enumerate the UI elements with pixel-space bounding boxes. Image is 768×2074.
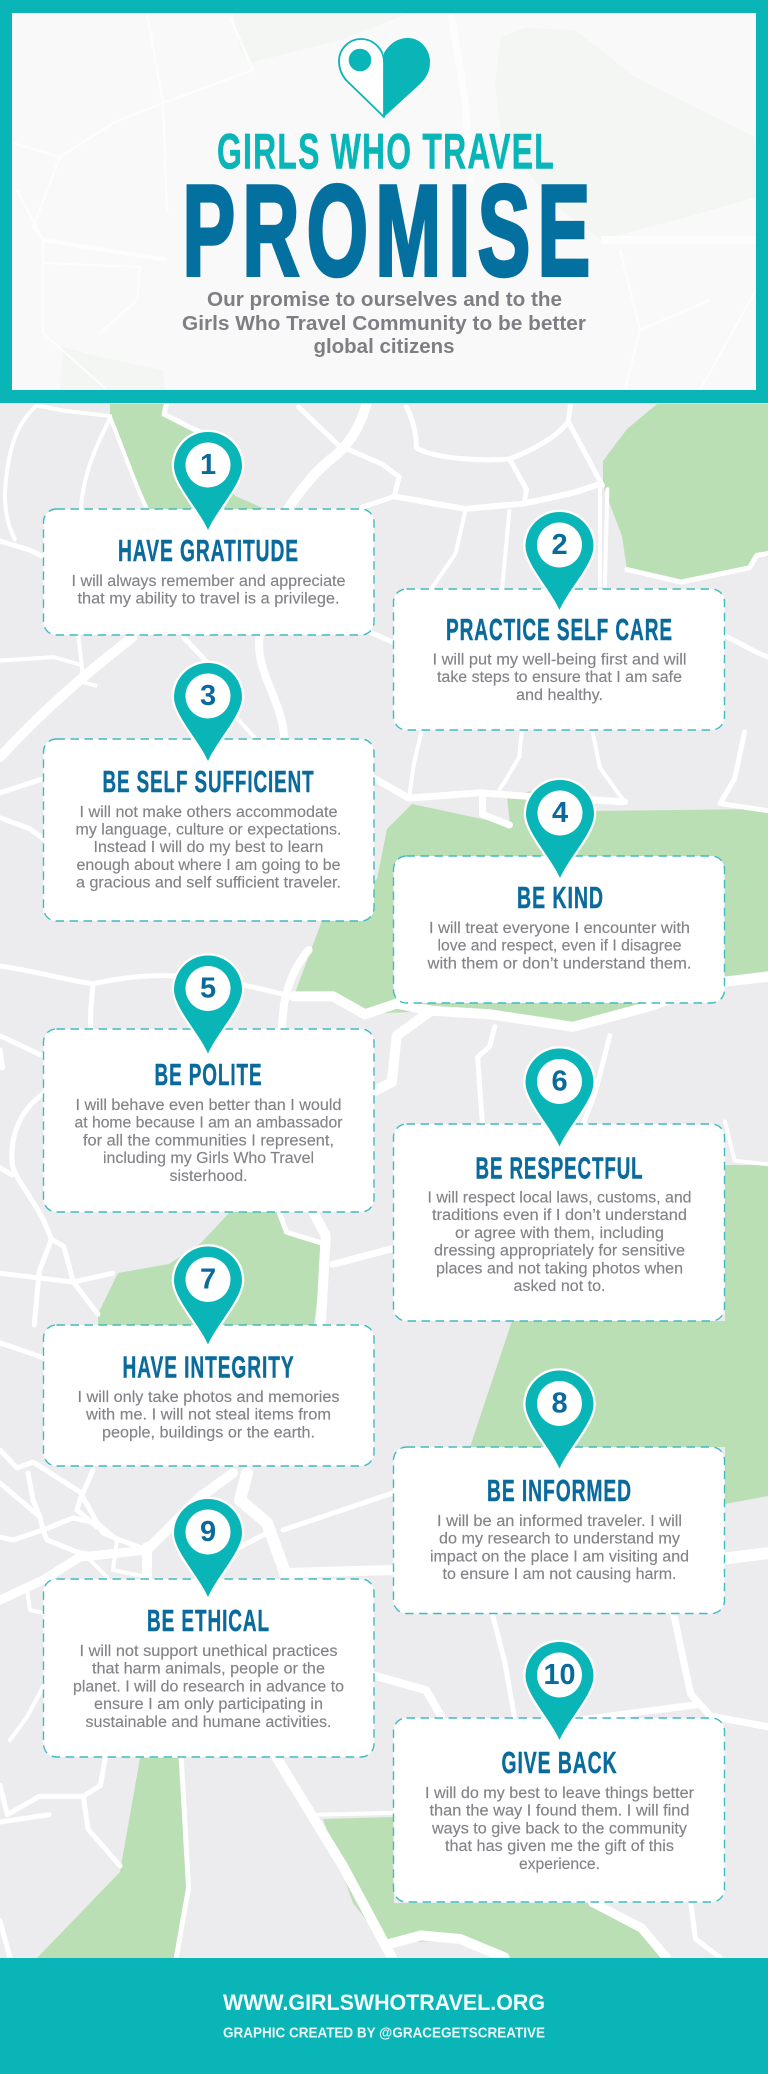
icon: pin 7: [174, 1246, 242, 1344]
panel: be ethical: planet. I will do research in advance to: [73, 1678, 344, 1695]
panel: be self sufficient: BE SELF SUFFICIENT: [102, 764, 314, 799]
icon: pin 3: 3: [200, 680, 216, 712]
panel: be respectful: I will respect local laws, customs, and: [428, 1190, 692, 1206]
panel: have gratitude: HAVE GRATITUDE: [118, 533, 299, 568]
panel: give back: that has given me the gift of this: [445, 1838, 674, 1855]
subtitle: Girls Who Travel Community to be better: [182, 312, 586, 335]
subtitle: Our promise to ourselves and to the: [207, 288, 562, 311]
icon: pin 10: 10: [544, 1659, 576, 1691]
icon: pin 9: 9: [200, 1516, 216, 1548]
panel: be polite: [44, 956, 374, 1212]
panel: be informed: [394, 1370, 724, 1614]
panel: be respectful: BE RESPECTFUL: [476, 1150, 644, 1186]
panel: have integrity: people, buildings or the earth.: [102, 1424, 315, 1441]
footer: [0, 1958, 768, 2074]
icon: pin 1: 1: [200, 449, 216, 481]
panel: be informed: I will be an informed traveler. I will: [437, 1513, 682, 1530]
panel: be informed: BE INFORMED: [487, 1473, 632, 1508]
icon: pin 9: [174, 1499, 242, 1597]
panel: be respectful: dressing appropriately for sensitive: [434, 1243, 685, 1260]
panel: be respectful: [394, 1048, 724, 1321]
icon: heart map pin logo: [339, 38, 430, 117]
panel: be polite: I will behave even better than I would: [76, 1097, 342, 1114]
subtitle: [182, 288, 586, 358]
footer credit: GRAPHIC CREATED BY @GRACEGETSCREATIVE: [223, 2026, 545, 2042]
icon: pin 5: 5: [200, 972, 216, 1004]
panel: be informed: to ensure I am not causing harm.: [442, 1566, 676, 1583]
panel: practice self care: and healthy.: [516, 687, 603, 704]
panel: be ethical: BE ETHICAL: [147, 1603, 270, 1638]
panel: have integrity: [44, 1246, 374, 1466]
subtitle: global citizens: [314, 335, 454, 358]
panel: be polite: sisterhood.: [170, 1168, 248, 1185]
panel: be kind: I will treat everyone I encounter with: [429, 920, 690, 937]
panel: practice self care: [394, 512, 724, 730]
panel: give back: ways to give back to the community: [431, 1820, 687, 1837]
icon: pin 3: [174, 663, 242, 761]
panel: be self sufficient: [44, 663, 374, 921]
icon: pin 10: [526, 1642, 594, 1740]
panel: be ethical: I will not support unethical practices: [80, 1643, 338, 1660]
panel: be self sufficient: I will not make others accommodate: [80, 804, 338, 821]
icon: pin 5: [174, 956, 242, 1054]
panel: practice self care: take steps to ensure that I am safe: [437, 669, 682, 686]
icon: pin 2: [526, 512, 594, 610]
background map: [0, 400, 768, 1960]
panel: be kind: [394, 780, 724, 1003]
panel: have gratitude: that my ability to travel is a privilege.: [78, 591, 340, 608]
panel: be respectful: or agree with them, including: [455, 1225, 664, 1242]
panel: be ethical: sustainable and humane activities.: [86, 1714, 332, 1731]
dense road junction: [0, 1450, 393, 1740]
panel: be polite: for all the communities I represent,: [83, 1132, 334, 1149]
panel: give back: than the way I found them. I will find: [430, 1803, 690, 1820]
faded header map: [13, 13, 756, 390]
panel: give back: [394, 1642, 724, 1902]
icon: pin 7: 7: [200, 1264, 216, 1296]
panel: give back: I will do my best to leave things better: [425, 1785, 694, 1802]
panel: practice self care: I will put my well-being first and will: [432, 652, 686, 668]
panel: be self sufficient: my language, culture or expectations.: [76, 822, 342, 839]
icon: pin 8: 8: [551, 1388, 568, 1420]
icon: pin 4: [526, 780, 594, 878]
icon: pin 2: 2: [551, 529, 568, 561]
icon: pin 6: 6: [551, 1066, 568, 1098]
header panel: [0, 0, 768, 403]
panel: be ethical: that harm animals, people or the: [92, 1661, 325, 1678]
panel: have gratitude: I will always remember and appreciate: [72, 573, 346, 590]
panel: be ethical: ensure I am only participating in: [94, 1696, 323, 1713]
panel: be kind: with them or don’t understand them.: [426, 955, 692, 972]
panel: be respectful: places and not taking photos when: [436, 1260, 683, 1277]
panel: be self sufficient: Instead I will do my best to learn: [94, 839, 324, 856]
footer url: WWW.GIRLSWHOTRAVEL.ORG: [223, 1990, 545, 2015]
panel: have integrity: I will only take photos and memories: [78, 1389, 340, 1406]
panel: be respectful: asked not to.: [514, 1278, 606, 1295]
icon: pin 6: [526, 1048, 594, 1146]
panel: be informed: impact on the place I am visiting and: [430, 1548, 689, 1565]
icon: pin 4: 4: [552, 797, 568, 829]
panel: have integrity: HAVE INTEGRITY: [122, 1350, 294, 1384]
title: girls who travel: GIRLS WHO TRAVEL: [217, 124, 555, 180]
panel: be respectful: traditions even if I don’t understand: [432, 1207, 687, 1224]
panel: be kind: BE KIND: [517, 880, 604, 915]
panel: give back: GIVE BACK: [502, 1745, 618, 1780]
panel: be ethical: [44, 1499, 374, 1757]
panel: have gratitude: [44, 432, 374, 635]
panel: give back: experience.: [519, 1856, 600, 1873]
panel: be polite: BE POLITE: [154, 1057, 262, 1092]
icon: pin 1: [174, 432, 242, 530]
panel: be kind: love and respect, even if I disagree: [438, 938, 682, 955]
panel: be polite: at home because I am an ambassador: [74, 1115, 342, 1132]
panel: be informed: do my research to understand my: [439, 1531, 680, 1548]
panel: be polite: including my Girls Who Travel: [103, 1150, 314, 1167]
icon: pin 8: [526, 1370, 594, 1468]
panel: be self sufficient: a gracious and self sufficient traveler.: [76, 874, 341, 891]
panel: have integrity: with me. I will not steal items from: [85, 1407, 331, 1424]
panel: be self sufficient: enough about where I am going to be: [76, 857, 340, 874]
